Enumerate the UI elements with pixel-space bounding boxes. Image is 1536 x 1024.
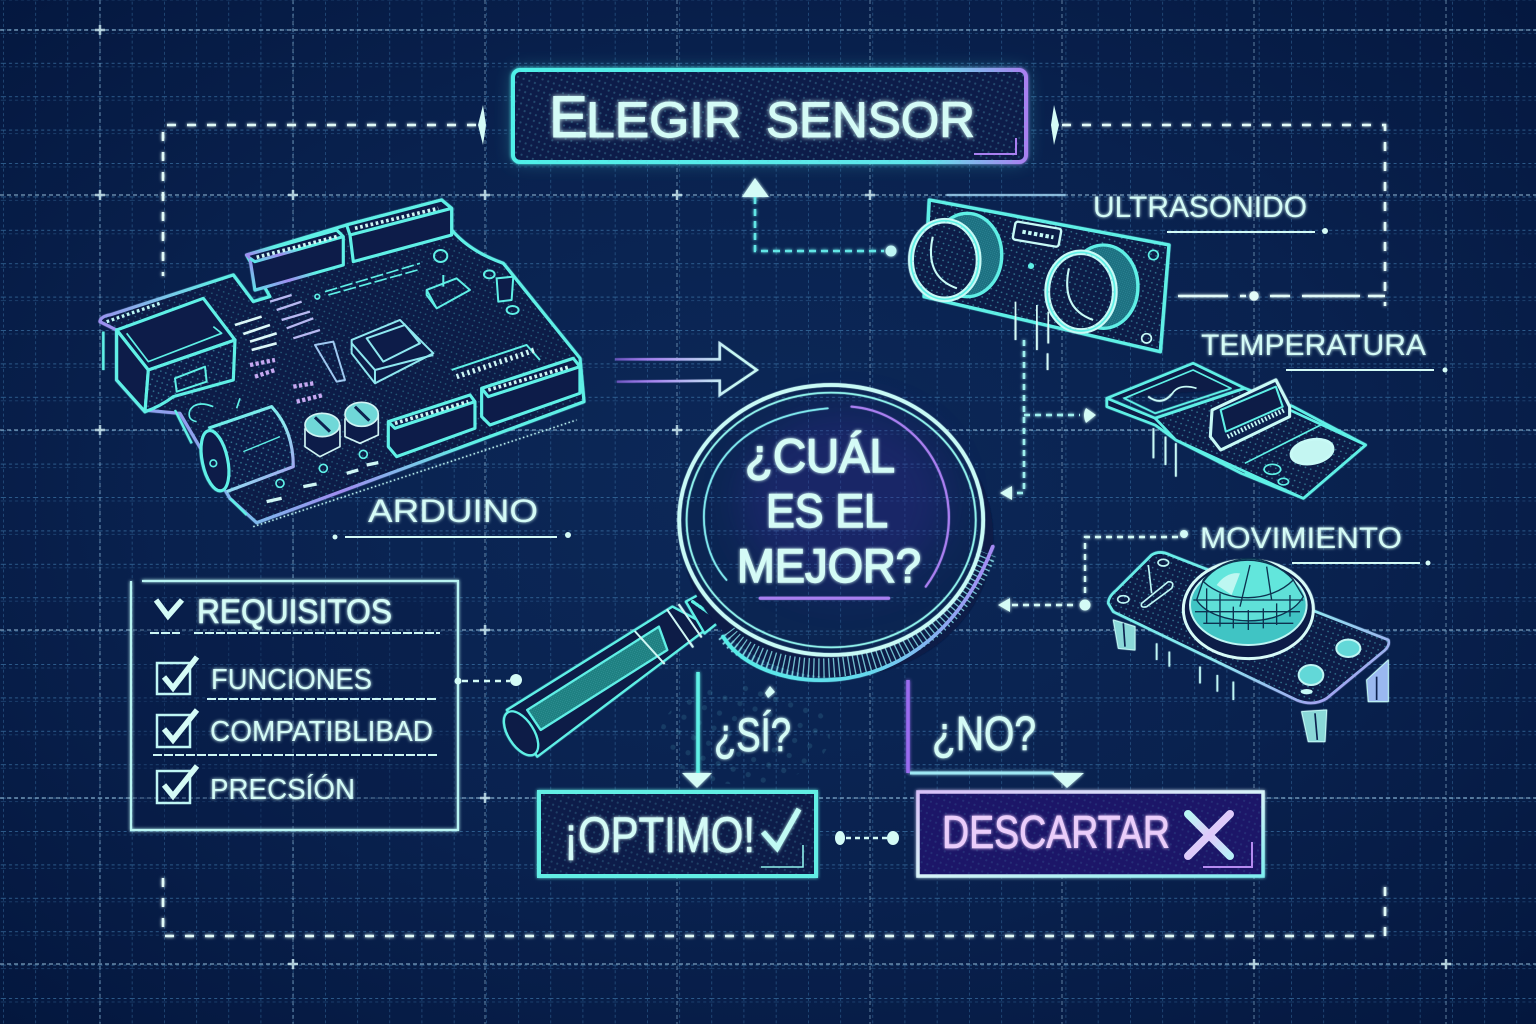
header pins top right — [347, 200, 452, 262]
question text in lens: ¿CUÁL — [745, 429, 895, 482]
label: ultrasonido: ULTRASONIDO — [1093, 191, 1307, 224]
label: arduino — [332, 493, 571, 540]
label: sí: ¿SÍ? — [714, 708, 791, 761]
left transducer — [911, 213, 1002, 299]
magnifier handle — [497, 592, 717, 761]
right transducer — [1047, 245, 1138, 331]
lens face — [681, 386, 981, 654]
item: funciones: FUNCIONES — [211, 664, 372, 696]
header pins bottom right — [482, 358, 580, 425]
question text in lens: MEJOR? — [737, 539, 921, 592]
title box: elegir sensor — [478, 70, 1059, 162]
microcontroller chip — [352, 320, 433, 383]
usb connector — [117, 298, 235, 412]
illustration: motion sensor — [1108, 552, 1389, 742]
board outline — [100, 200, 584, 523]
lens inner arcs — [704, 407, 949, 598]
icon: check — [763, 809, 799, 848]
header pins top left — [247, 230, 343, 290]
box: descartar — [918, 792, 1263, 876]
arrow: sí to óptimo — [682, 672, 775, 788]
arrow: no to descartar — [908, 680, 1084, 788]
board — [924, 200, 1169, 352]
box: descartar: DESCARTAR — [942, 806, 1170, 858]
box: óptimo: ¡OPTIMO! — [564, 807, 755, 863]
barrel jack — [196, 407, 293, 493]
item: compatiblibad: COMPATIBLIBAD — [210, 716, 433, 748]
dome — [1183, 560, 1313, 659]
item: precsión: PRECSÍÓN — [210, 773, 355, 806]
label: temperatura: TEMPERATURA — [1201, 329, 1426, 362]
heading: requisitos: REQUISITOS — [197, 593, 392, 631]
lens rim — [683, 396, 993, 680]
legs — [1113, 620, 1135, 650]
question text in lens: ES EL — [766, 484, 888, 537]
item: funciones — [157, 657, 372, 696]
header pins bottom middle — [388, 395, 475, 457]
title text: SENSOR — [766, 92, 975, 148]
box: óptimo — [539, 792, 816, 876]
title text: E — [549, 85, 588, 150]
connector: óptimo to descartar — [835, 831, 899, 845]
question text in lens — [737, 429, 921, 592]
sensor clip — [1210, 380, 1290, 450]
icon: chevron check — [156, 600, 182, 616]
label: no: ¿NO? — [932, 708, 1036, 761]
label: temperatura — [1201, 329, 1448, 372]
capacitors — [305, 402, 378, 457]
item: compatiblibad — [157, 710, 433, 748]
icon: x mark — [1188, 814, 1230, 856]
label: arduino: ARDUINO — [368, 493, 538, 529]
halftone patch below magnifier — [660, 685, 830, 785]
panel: requisitos checklist — [131, 581, 458, 830]
outer dashed process frame — [163, 125, 1385, 936]
title text: LEGIR — [586, 92, 741, 148]
pcb — [1108, 552, 1389, 703]
arrow: arduino to magnifier — [615, 343, 757, 395]
connector: movimiento to magnifier — [998, 530, 1188, 612]
item: precsión — [157, 766, 355, 806]
small components — [427, 275, 470, 308]
arrow: ultrasonido to title — [742, 178, 896, 256]
connector: ultrasonido to frame — [1178, 292, 1385, 300]
connector: sensors to magnifier — [1000, 340, 1096, 500]
illustration: ultrasonic sensor — [911, 195, 1169, 370]
label: movimiento — [1200, 522, 1430, 566]
illustration: temperature sensor — [1107, 363, 1365, 498]
illustration: arduino board — [100, 200, 584, 527]
magnifying glass — [497, 385, 993, 761]
label: movimiento: MOVIMIENTO — [1200, 522, 1402, 555]
connector: requisitos to magnifier — [454, 674, 522, 686]
